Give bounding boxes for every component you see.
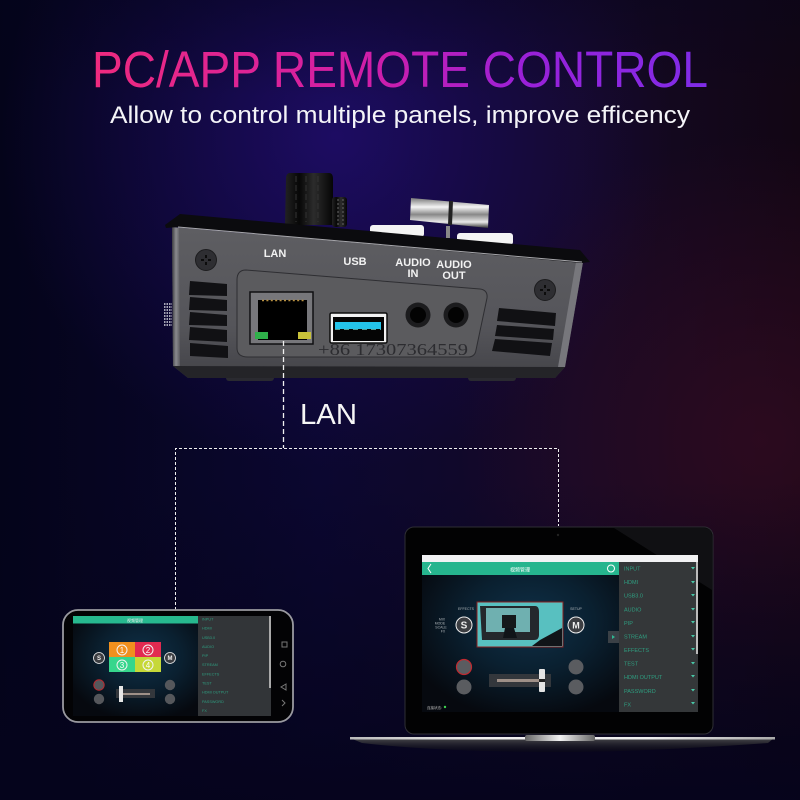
menu: PIP bbox=[202, 654, 209, 658]
right vents bbox=[492, 308, 556, 356]
laptop base bbox=[350, 735, 775, 752]
right menu: STREAM bbox=[624, 634, 647, 640]
effects labels: SCALE bbox=[435, 626, 447, 630]
right menu: PASSWORD bbox=[624, 689, 656, 695]
M button: M bbox=[572, 620, 580, 630]
phone bbox=[63, 610, 293, 722]
LAN port bbox=[250, 292, 313, 344]
right edge highlight bbox=[558, 262, 583, 367]
port labels: USB bbox=[343, 256, 367, 268]
source grid: 4 bbox=[146, 661, 151, 670]
panel toggle bbox=[608, 631, 619, 643]
status: 连接状态: bbox=[427, 705, 442, 710]
stage background bbox=[422, 562, 619, 712]
preview image bbox=[477, 602, 563, 647]
left edge highlight bbox=[172, 227, 180, 366]
app window bbox=[422, 555, 698, 712]
right menu: USB3.0 bbox=[624, 594, 643, 600]
control buttons bbox=[456, 660, 584, 694]
slider bbox=[489, 669, 551, 692]
watermark phone number: +86 17307364559 bbox=[318, 340, 468, 359]
right menu: PIP bbox=[624, 621, 633, 627]
menu: AUDIO bbox=[202, 645, 214, 649]
menu: STREAM bbox=[202, 663, 218, 667]
menu: HDMI bbox=[202, 626, 212, 630]
title: PC/APP REMOTE CONTROL bbox=[92, 41, 708, 98]
right menu: EFFECTS bbox=[624, 648, 649, 654]
right menu: FX bbox=[624, 702, 631, 708]
menu bbox=[198, 616, 271, 716]
green header bbox=[422, 562, 619, 575]
phone green header bbox=[73, 616, 198, 624]
menu: HDMI OUTPUT bbox=[202, 690, 229, 694]
phone frame bbox=[63, 610, 293, 722]
lower chamfer bbox=[173, 366, 565, 378]
fader handle bbox=[410, 198, 489, 238]
port labels bbox=[264, 248, 472, 282]
audio in jack bbox=[406, 302, 430, 328]
right menu: AUDIO bbox=[624, 608, 642, 614]
title bar bbox=[422, 555, 698, 562]
S button bbox=[456, 617, 472, 633]
menu: USB3.0 bbox=[202, 636, 215, 640]
audio out jack bbox=[444, 302, 468, 328]
icon: screw left bbox=[196, 250, 216, 270]
port labels: OUT bbox=[442, 270, 466, 282]
source grid bbox=[109, 642, 161, 672]
LAN dashed connection lines bbox=[176, 341, 558, 610]
laptop bbox=[350, 527, 775, 752]
effects labels: MODE bbox=[435, 622, 446, 626]
M button bbox=[568, 617, 584, 633]
menu: FX bbox=[202, 709, 207, 713]
feet bbox=[226, 375, 516, 381]
top plate bbox=[165, 214, 590, 263]
side switch detail bbox=[164, 304, 172, 325]
effects labels: FX bbox=[441, 630, 446, 634]
right menu: INPUT bbox=[624, 566, 641, 572]
right menu bbox=[619, 562, 698, 712]
subtitle: Allow to control multiple panels, improve efficency bbox=[110, 102, 691, 129]
right menu: TEST bbox=[624, 662, 639, 668]
effects labels: EFFECTS bbox=[458, 607, 475, 611]
menu: INPUT bbox=[202, 618, 214, 622]
device: video switcher rear panel bbox=[164, 173, 590, 381]
icon: main rotary knob bbox=[285, 173, 347, 227]
S and M buttons: S bbox=[97, 656, 101, 662]
right menu: HDMI OUTPUT bbox=[624, 675, 663, 681]
LAN label: LAN bbox=[300, 399, 357, 431]
control buttons bbox=[94, 680, 175, 704]
source grid: 3 bbox=[120, 661, 125, 670]
source grid: 2 bbox=[146, 646, 151, 655]
green header: 视频管理 bbox=[510, 566, 530, 574]
left vents bbox=[189, 281, 228, 358]
laptop bezel bbox=[405, 527, 713, 734]
port labels: IN bbox=[408, 268, 419, 280]
source grid: 1 bbox=[120, 646, 125, 655]
USB port bbox=[330, 313, 387, 343]
effects labels: MIX bbox=[439, 618, 446, 622]
port labels: LAN bbox=[264, 248, 286, 260]
status bbox=[427, 705, 446, 710]
menu: TEST bbox=[202, 682, 212, 686]
phone green header: 视频管理 bbox=[127, 617, 143, 623]
effects labels bbox=[435, 607, 582, 634]
phone stage bbox=[73, 616, 198, 716]
menu: PASSWORD bbox=[202, 700, 224, 704]
S and M buttons bbox=[94, 652, 176, 664]
nav buttons bbox=[280, 642, 287, 706]
slider bbox=[116, 686, 155, 702]
port labels: AUDIO bbox=[395, 257, 431, 269]
right menu: HDMI bbox=[624, 580, 639, 586]
white buttons bbox=[370, 225, 513, 245]
effects labels: SETUP bbox=[570, 607, 582, 611]
device body bbox=[172, 227, 583, 378]
camera bbox=[557, 534, 559, 536]
port labels: AUDIO bbox=[436, 259, 472, 271]
connector recess panel bbox=[237, 270, 487, 357]
S and M buttons: M bbox=[168, 656, 172, 662]
menu: EFFECTS bbox=[202, 672, 220, 676]
icon: screw right bbox=[534, 280, 556, 300]
S button: S bbox=[461, 620, 468, 632]
